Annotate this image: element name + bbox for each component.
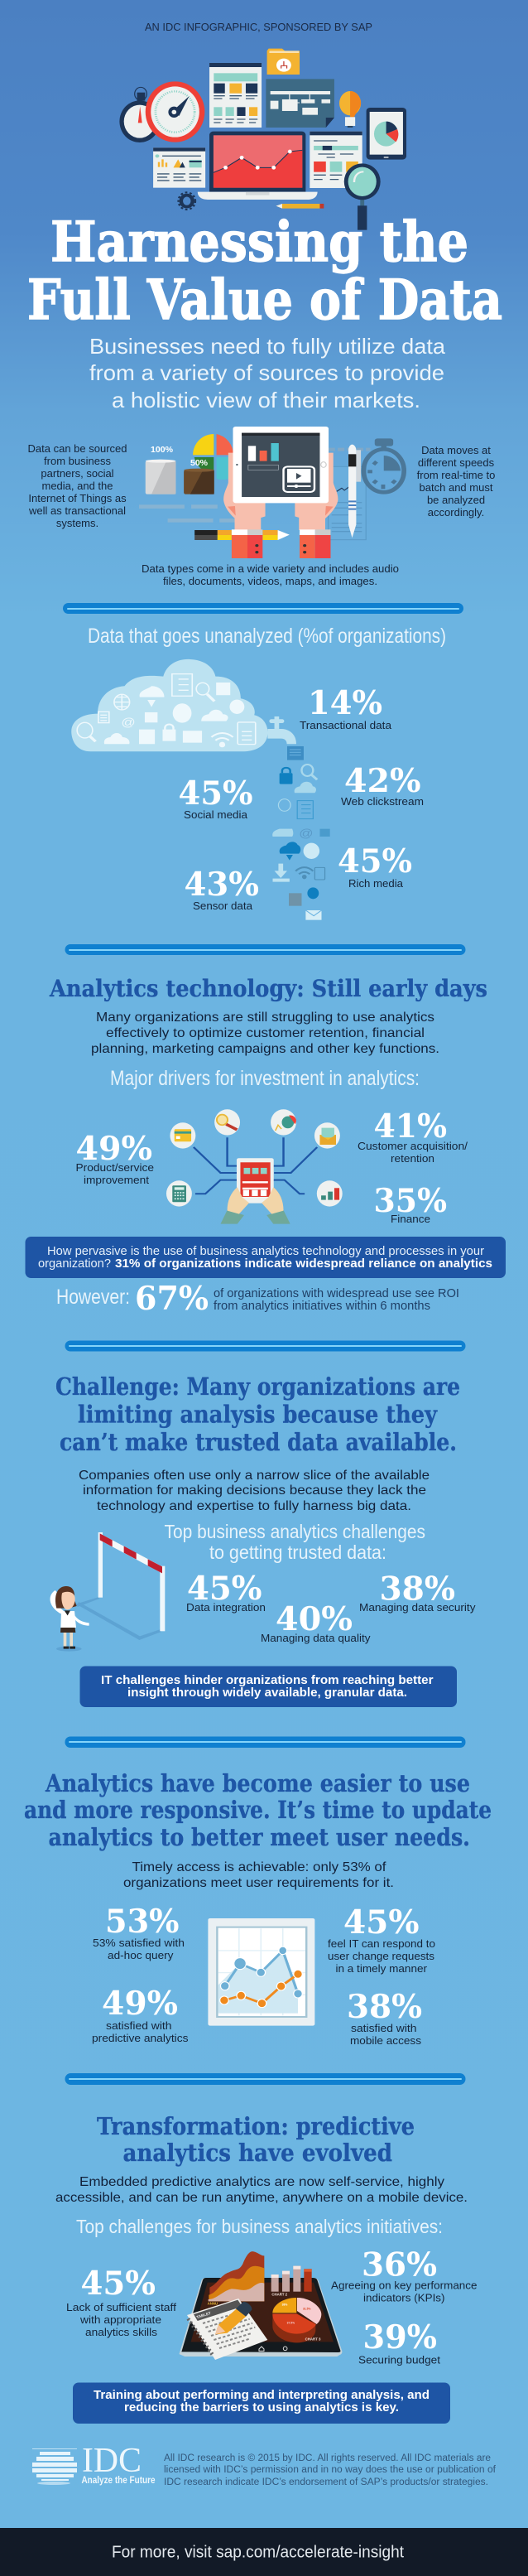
subheading: top challenges: Top business analytics challenges: [164, 1521, 425, 1542]
text: data sources: well as transactional: [28, 504, 126, 517]
icon: brown cylinder: [184, 469, 214, 494]
stat: 35% finance: 35%: [374, 1182, 447, 1220]
icon: layout document: [310, 132, 362, 188]
text: timely access: [123, 1860, 394, 1890]
labels on tablet: CHART 2: [271, 2293, 288, 2297]
illustration: line chart tablet: [208, 1918, 314, 2026]
chart lines: [224, 1951, 298, 2004]
heading: challenge: limiting analysis because they: [78, 1400, 438, 1428]
falling icons: [278, 746, 317, 819]
stat: 14% transactional data: Transactional data: [300, 719, 392, 731]
text: data types: [142, 562, 399, 587]
callout: pervasive use: How pervasive is the use of business analytics technology and processes in your: [47, 1245, 484, 1258]
text: data types: Data types come in a wide variety and includes audio: [142, 562, 399, 575]
stat: 14% transactional data: 14%: [308, 684, 382, 722]
logo: IDC: IDC: [82, 2442, 142, 2480]
hero illustration: analytics dashboard devices: [119, 49, 406, 230]
icon: credit card: [175, 1129, 191, 1141]
text: data sources: media, and the: [41, 480, 113, 492]
icon: calculator: [172, 1185, 186, 1202]
icon: folder: [267, 49, 300, 75]
callout: IT challenges: IT challenges hinder organizations from reaching better: [101, 1673, 434, 1687]
icon: striped globe: [32, 2448, 77, 2485]
illustration: data cloud pouring icons from a tap: [71, 659, 317, 819]
text: challenge intro: technology and expertise to fully harness big data.: [97, 1499, 411, 1513]
icon: speedometer gauge: [146, 81, 204, 142]
hurdle shadow: [76, 1597, 161, 1640]
pie chart: [272, 2298, 321, 2342]
text: data sources: from business: [44, 455, 111, 467]
labels on tablet: 31.5%: [303, 2308, 310, 2311]
stat: 41% customer acquisition: 41%: [374, 1107, 447, 1146]
labels on tablet: 38%: [282, 2303, 287, 2306]
stat: 39% securing budget: Securing budget: [358, 2354, 440, 2366]
grey placeholder lines: [139, 504, 235, 523]
icon: magnifier: [217, 1115, 237, 1130]
text: data speed: [417, 444, 495, 519]
text: analytics intro: [91, 1011, 439, 1056]
stat: 45% lack of staff: [66, 2265, 176, 2338]
stat: 45% social media: 45%: [179, 774, 253, 813]
icon: tablet: [233, 427, 329, 503]
icon: flowchart note: [266, 79, 334, 128]
text: data speed: from real-time to: [417, 469, 495, 481]
heading: challenge: Challenge: Many organizations are: [55, 1372, 460, 1401]
heading: transformation: analytics have evolved: [122, 2139, 392, 2167]
stat: 45% rich media: 45%: [338, 842, 412, 880]
heading: analytics easier: Analytics have become easier to use: [45, 1769, 470, 1797]
stat: 45% lack of staff: 45%: [81, 2265, 156, 2303]
icon: pen: [348, 445, 361, 538]
divider: [65, 1340, 465, 1352]
text: legal notice: licensed with IDC’s permission and in no way does the use or publication of: [164, 2465, 497, 2475]
icon: hands holding tablet: [223, 453, 338, 530]
stat: 38% managing data security: [359, 1570, 476, 1614]
labels on tablet: ANNU: [208, 2301, 218, 2305]
subtitle: a holistic view of their markets.: [112, 388, 420, 412]
footer bar: For more, visit sap.com/accelerate-insight: [112, 2543, 404, 2561]
icon: tap: [267, 716, 296, 744]
text: challenge intro: information for making decisions because they lack the: [83, 1483, 426, 1498]
text: legal notice: [164, 2453, 497, 2487]
text: data sources: [28, 442, 127, 529]
stat: 36% agreeing on KPIs: 36%: [362, 2246, 437, 2284]
divider: [65, 2073, 465, 2085]
heading: data that goes unanalyzed: Data that goes unanalyzed (%of organizations): [88, 625, 446, 648]
stat: 45% respond to requests: in a timely manner: [336, 1962, 428, 1975]
chart points: [220, 1946, 302, 2008]
stat: 38% mobile access: satisfied with: [351, 2022, 417, 2034]
stat: 53% ad-hoc query: [93, 1903, 185, 1961]
chart labels 100% and 50%: 100%: [151, 445, 174, 455]
icon: chart bubble: [276, 1115, 296, 1131]
icons: home and search: [259, 2347, 287, 2351]
icon: shirt cuffs: [232, 529, 330, 558]
stat: 38% managing data security: 38%: [379, 1570, 455, 1609]
heading: transformation: [97, 2112, 415, 2167]
stat: 38% mobile access: 38%: [347, 1988, 422, 2026]
stat: 45% rich media: Rich media: [348, 877, 404, 890]
stat: 49% product/service improvement: [76, 1130, 154, 1186]
text: timely access: Timely access is achievable: only 53% of: [132, 1860, 386, 1874]
falling icons continued: @: [299, 827, 314, 840]
bar chart: [271, 2266, 312, 2292]
subtitle: Businesses need to fully utilize data: [89, 334, 446, 359]
stat: 35% finance: Finance: [391, 1213, 430, 1225]
stat: 40% managing data quality: 40%: [276, 1600, 353, 1638]
divider: [65, 1736, 465, 1748]
stat: however 67%: of organizations with widespread use see ROI: [214, 1287, 459, 1300]
text: analytics intro: Many organizations are still struggling to use analytics: [96, 1011, 434, 1025]
icon: web document: [209, 63, 262, 128]
sponsor line: AN IDC INFOGRAPHIC, SPONSORED BY SAP: [145, 22, 372, 33]
stat: 36% agreeing on KPIs: [331, 2246, 477, 2304]
stat: 49% predictive analytics: 49%: [102, 1985, 178, 2023]
illustration: tablet with charts and notebook: [180, 2251, 342, 2360]
icon: notebook and pencil: [187, 2299, 267, 2360]
text: data speed: different speeds: [418, 456, 495, 469]
stat: 45% data integration: 45%: [187, 1570, 262, 1608]
stat: 49% predictive analytics: predictive analytics: [92, 2032, 189, 2044]
stat: 40% managing data quality: [261, 1600, 371, 1644]
text: legal notice: All IDC research is © 2015 by IDC. All rights reserved. All IDC materials are: [164, 2453, 491, 2463]
tablet frame: [208, 1918, 314, 2026]
stat: 45% respond to requests: user change requests: [328, 1950, 435, 1962]
stat: 49% predictive analytics: satisfied with: [106, 2019, 172, 2032]
stat: 41% customer acquisition: [358, 1107, 468, 1165]
callout: training: [73, 2382, 450, 2424]
callout: training: reducing the barriers to using analytics is key.: [124, 2400, 399, 2414]
divider: [65, 944, 465, 955]
connector lines: [194, 1137, 317, 1194]
icon: laptop with line chart: [198, 132, 318, 200]
subtitle: from a variety of sources to provide: [89, 360, 444, 385]
icon: magnifying glass: [344, 163, 381, 230]
stat: 38% managing data security: Managing data security: [359, 1601, 476, 1614]
icon: stopwatch: [119, 87, 160, 142]
title: [27, 210, 502, 332]
stat: 43% sensor data: Sensor data: [193, 900, 253, 912]
heading: analytics easier: analytics to better meet user needs.: [48, 1823, 470, 1851]
icon: light bulb: [339, 91, 361, 128]
stat: 36% agreeing on KPIs: Agreeing on key performance: [331, 2279, 477, 2291]
text: analytics intro: effectively to optimize customer retention, financial: [106, 1026, 425, 1040]
labels on tablet: 37.5%: [287, 2322, 295, 2325]
callout: IT challenges: [79, 1667, 457, 1707]
area chart: [209, 2251, 264, 2301]
icon bubbles: [166, 1109, 343, 1207]
footer bar: [0, 2528, 528, 2576]
stat: 53% ad-hoc query: 53%: [105, 1903, 179, 1941]
stat: 45% respond to requests: [328, 1903, 435, 1975]
stat: 49% product/service improvement: improvement: [84, 1174, 149, 1186]
text: data sources: Data can be sourced: [28, 442, 127, 455]
illustration: woman facing a hurdle: [50, 1532, 165, 1652]
heading: transformation: Transformation: predictive: [97, 2112, 415, 2140]
text: analytics intro: planning, marketing campaigns and other key functions.: [91, 1042, 439, 1056]
stat: 14% transactional data: [300, 684, 392, 731]
stat: 49% product/service improvement: Product/service: [76, 1161, 154, 1174]
text: data types: files, documents, videos, maps, and images.: [163, 575, 377, 587]
hurdle: [98, 1532, 165, 1631]
chart labels 100% and 50%: 50%: [190, 458, 209, 468]
text: legal notice: IDC research indicate IDC’s endorsement of SAP’s products/or strategies.: [164, 2477, 488, 2487]
labels on tablet: CHART 3: [305, 2337, 321, 2341]
text: timely access: organizations meet user requirements for it.: [123, 1876, 394, 1890]
icon: bar chart: [321, 1188, 339, 1200]
icon: pie chart: [193, 434, 233, 480]
stat: however 67%: However:: [56, 1286, 130, 1309]
subtitle: [89, 334, 446, 412]
stat: 42% web clickstream: 42%: [344, 762, 420, 800]
icon: hands holding tablet: [220, 1158, 290, 1224]
text: challenge intro: [79, 1469, 430, 1513]
subheading: top challenges for initiatives: Top challenges for business analytics initiatives:: [76, 2216, 443, 2237]
text: embedded predictive analytics: accessible, and can be run anytime, anywhere on a mobile device.: [55, 2191, 468, 2205]
text: embedded predictive analytics: Embedded predictive analytics are now self-service, highly: [79, 2175, 444, 2189]
icon: tablet with pie chart: [367, 108, 406, 160]
heading: challenge: can’t make trusted data available.: [60, 1428, 457, 1456]
stat: 40% managing data quality: Managing data quality: [261, 1632, 371, 1644]
subheading: top challenges: [164, 1521, 425, 1563]
text: data speed: Data moves at: [421, 444, 491, 456]
stat: however 67%: from analytics initiatives within 6 months: [214, 1300, 430, 1313]
icon: notebook and pencil: TABLET: [196, 2311, 212, 2319]
text: embedded predictive analytics: [55, 2175, 468, 2205]
stat: 53% ad-hoc query: ad-hoc query: [108, 1949, 174, 1961]
text: data sources: Internet of Things as: [28, 492, 127, 504]
stat: 49% product/service improvement: 49%: [76, 1130, 152, 1168]
stat: 42% web clickstream: Web clickstream: [341, 795, 424, 808]
subheading: top challenges: to getting trusted data:: [209, 1541, 386, 1563]
text: data speed: be analyzed: [427, 494, 485, 506]
text: data sources: systems.: [56, 517, 98, 529]
icon: pencil: [276, 204, 324, 209]
stat: however 67%: 67%: [135, 1280, 209, 1318]
stat: 43% sensor data: 43%: [184, 866, 259, 904]
labels on tablet: [208, 2293, 321, 2341]
stat: 45% lack of staff: with appropriate: [79, 2313, 161, 2326]
callout: pervasive use: [25, 1237, 506, 1278]
stat: 41% customer acquisition: Customer acquisition/: [358, 1140, 468, 1152]
intro illustration: tablet, data sources and speed: [139, 427, 404, 558]
callout: IT challenges: insight through widely available, granular data.: [127, 1686, 407, 1700]
stat: 38% mobile access: mobile access: [350, 2034, 422, 2047]
stat: 49% predictive analytics: [92, 1985, 189, 2044]
heading: analytics technology: Analytics technology: Still early days: [49, 975, 487, 1002]
text: data speed: batch and must: [420, 481, 493, 494]
icon: cloud: [71, 659, 268, 751]
callout: pervasive use: organization?: [38, 1257, 111, 1271]
icon: pencil: [194, 530, 290, 540]
heading: challenge: [55, 1372, 460, 1456]
stat: 45% social media: Social media: [184, 808, 248, 821]
icon: grey cylinder: [146, 460, 175, 494]
stat: 41% customer acquisition: retention: [391, 1152, 434, 1165]
logo: IDC: [32, 2442, 156, 2486]
icon: stopwatch: [363, 438, 404, 492]
icon: small charts document: [153, 147, 205, 188]
text: data sources: partners, social: [41, 467, 114, 480]
illustration: tablet connected to business icons: [166, 1109, 343, 1224]
decorative document behind hands: [329, 450, 370, 540]
title: Harnessing the: [50, 210, 468, 274]
stat: 45% data integration: Data integration: [186, 1601, 266, 1614]
tablet: [180, 2278, 342, 2357]
text: data speed: accordingly.: [428, 506, 484, 519]
stat: 39% securing budget: 39%: [362, 2318, 437, 2357]
icon: envelope: [319, 1128, 336, 1145]
stat: 53% ad-hoc query: 53% satisfied with: [93, 1937, 185, 1949]
chart labels 100% and 50%: [151, 445, 209, 468]
figure: woman: [50, 1586, 89, 1652]
stat: 38% mobile access: [347, 1988, 422, 2047]
subheading: major drivers: Major drivers for investment in analytics:: [110, 1067, 420, 1090]
stat: 45% respond to requests: feel IT can respond to: [328, 1937, 435, 1950]
icon: cloud: @: [121, 716, 136, 729]
callout: pervasive use: 31% of organizations indicate widespread reliance on analytics: [115, 1257, 492, 1271]
stat: 45% respond to requests: 45%: [343, 1903, 419, 1942]
icon: gear: [179, 192, 195, 210]
divider: [63, 603, 463, 614]
stat: 36% agreeing on KPIs: indicators (KPIs): [363, 2291, 445, 2304]
stat: however 67%: [56, 1280, 459, 1318]
heading: analytics easier: [24, 1769, 492, 1851]
text: challenge intro: Companies often use only a narrow slice of the available: [79, 1469, 430, 1483]
stat: 45% lack of staff: Lack of sufficient staff: [66, 2301, 176, 2313]
stat: 45% lack of staff: analytics skills: [85, 2326, 158, 2338]
logo: IDC: Analyze the Future: [81, 2476, 156, 2486]
callout: training: Training about performing and interpreting analysis, and: [94, 2388, 430, 2402]
